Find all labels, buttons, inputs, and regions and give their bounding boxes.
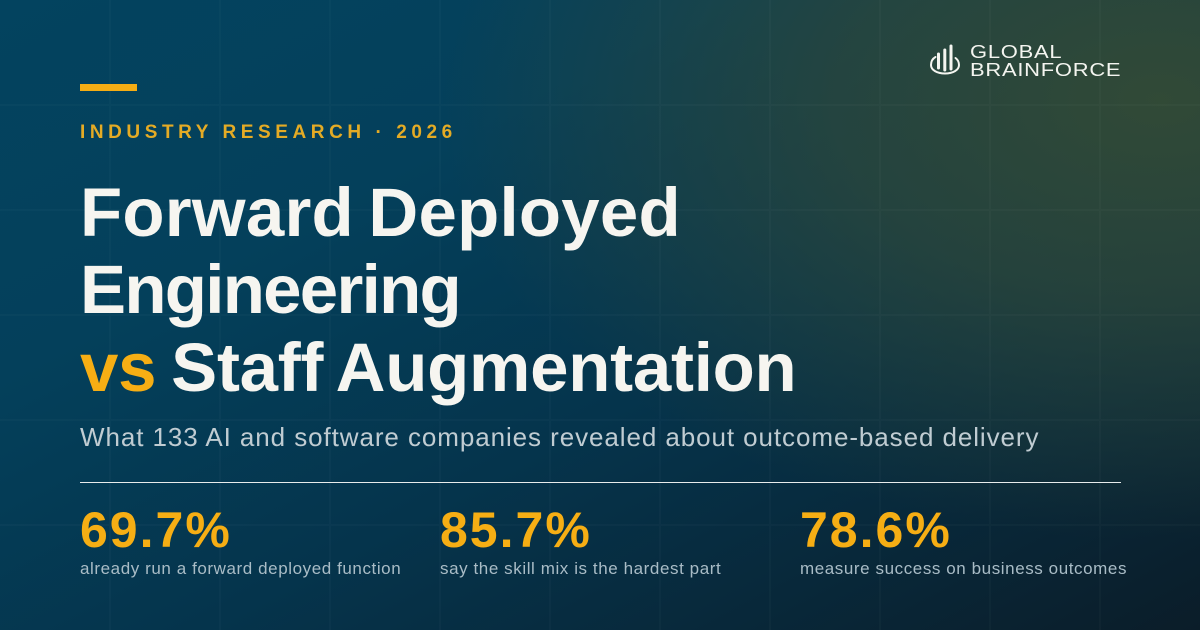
title line 2: Engineering (80, 251, 460, 328)
eyebrow: industry research: INDUSTRY RESEARCH · 2026 (80, 122, 457, 143)
stat 2 number: 85.7% (440, 502, 592, 558)
stat 3 caption: measure success on business outcomes (800, 559, 1127, 578)
logo wordmark: BRAINFORCE (970, 60, 1121, 80)
logo wordmark (970, 42, 1121, 80)
stat 2 (440, 502, 721, 578)
subtitle: What 133 AI and software companies revealed about outcome-based delivery (80, 422, 1039, 452)
stat 3 (800, 502, 1127, 578)
title line 1: Forward Deployed (80, 174, 681, 251)
logo: Global Brainforce (930, 42, 1121, 80)
stat 1 caption: already run a forward deployed function (80, 559, 401, 578)
title line 3: vs Staff Augmentation (80, 329, 796, 406)
title (80, 174, 796, 406)
divider (80, 482, 1121, 483)
icon: logo mark (930, 44, 960, 74)
stat 2 caption: say the skill mix is the hardest part (440, 559, 721, 578)
logo wordmark: GLOBAL (970, 42, 1062, 62)
stat 1 number: 69.7% (80, 502, 232, 558)
stat 3 number: 78.6% (800, 502, 952, 558)
stat 1 (80, 502, 401, 578)
accent bar (80, 84, 137, 91)
